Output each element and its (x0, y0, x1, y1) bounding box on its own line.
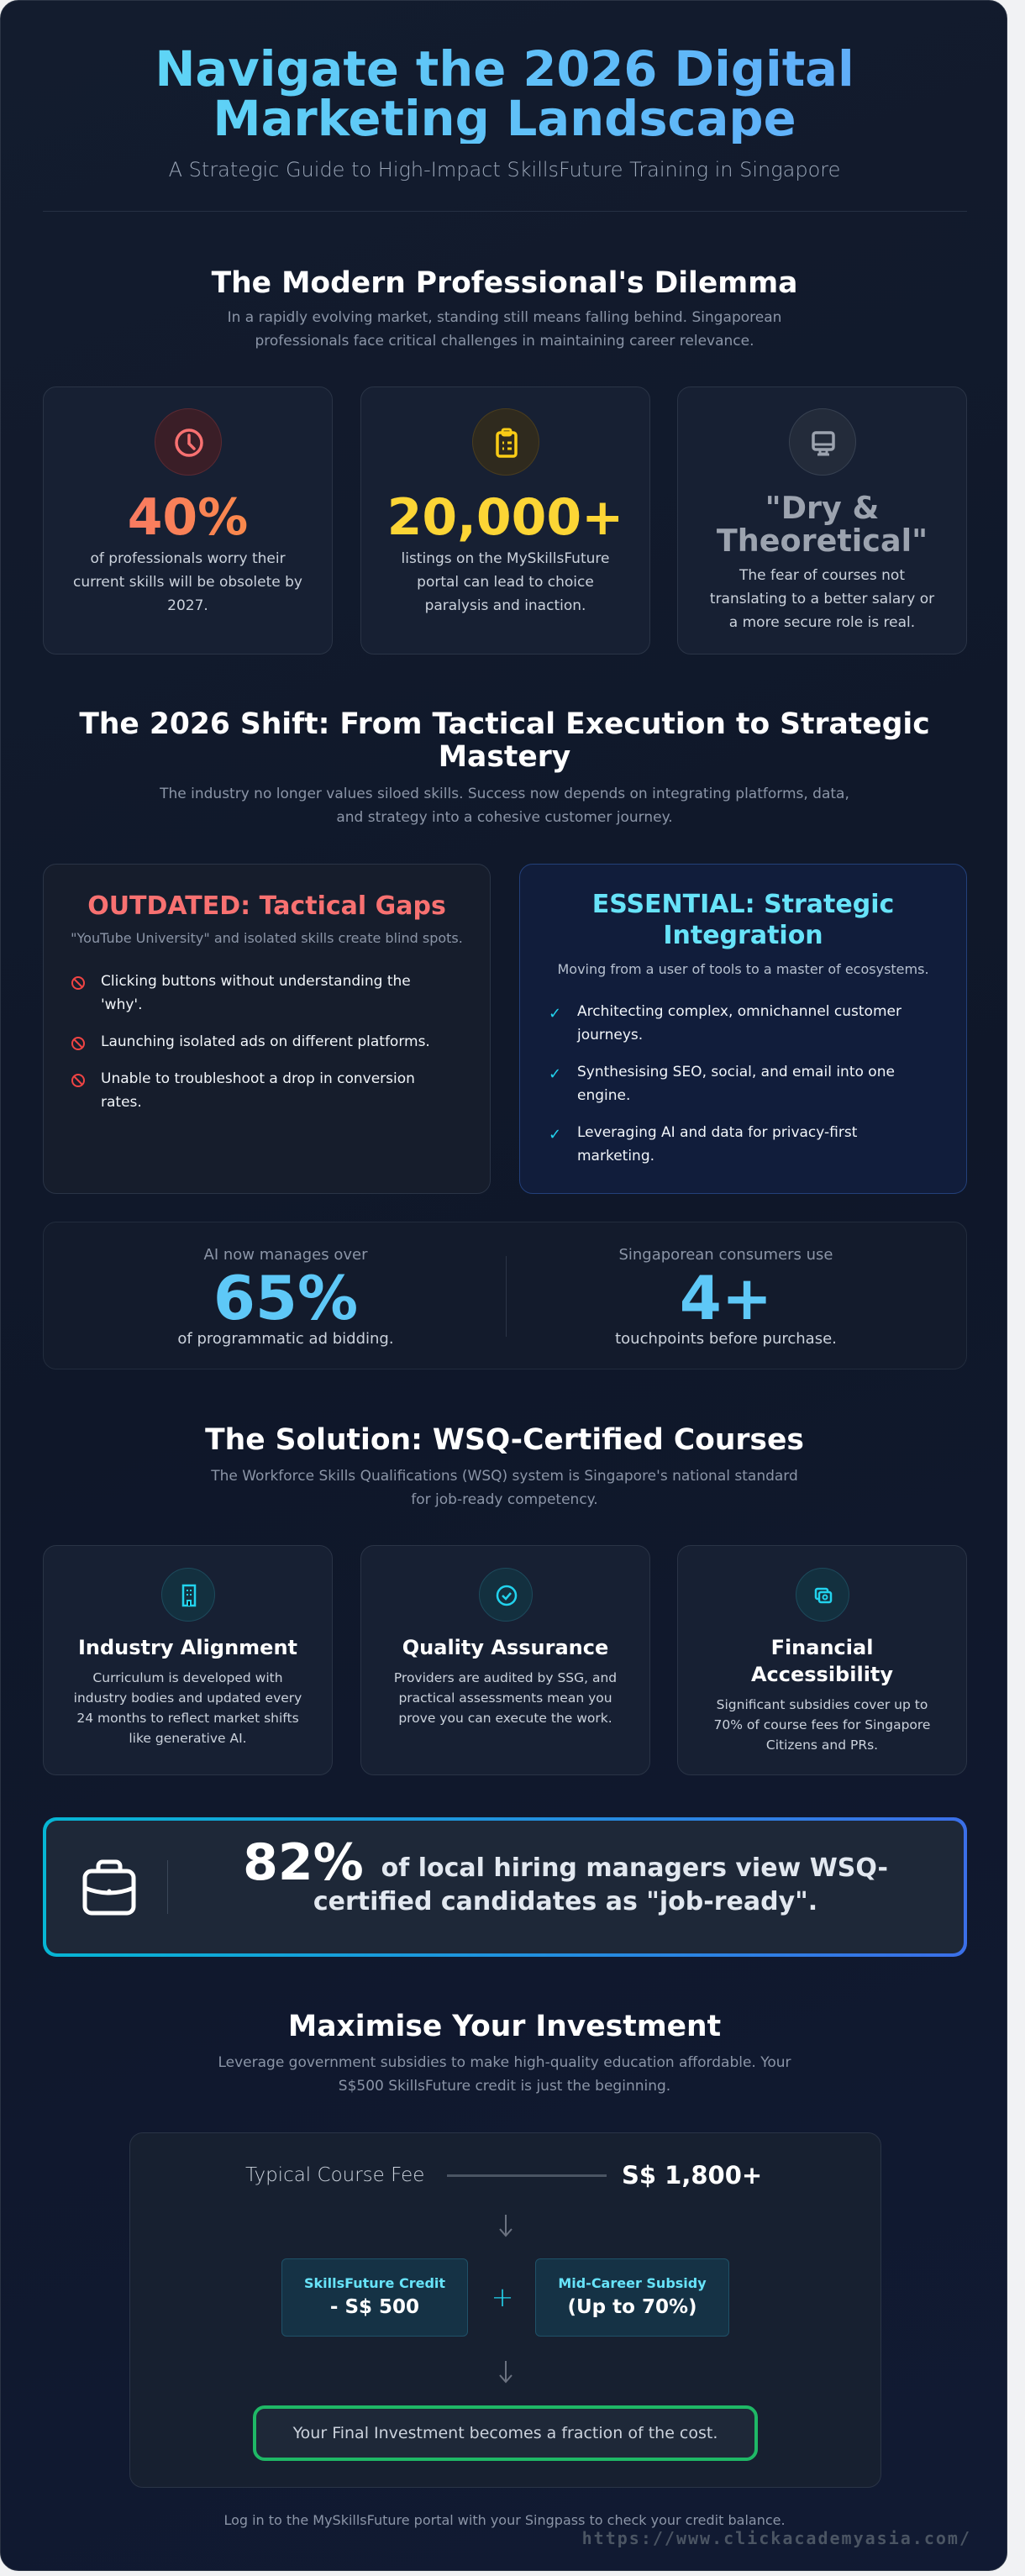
list (549, 1003, 901, 1164)
box: final investment: Your Final Investment becomes a fraction of the cost. (293, 2424, 718, 2442)
list (71, 973, 430, 1111)
text: 82% statement: certified candidates as "job-ready". (313, 1887, 817, 1916)
list: 'why'. (101, 996, 143, 1013)
title: Marketing Landscape (213, 91, 796, 147)
box: skillsfuture credit (281, 2258, 468, 2337)
text: maximise intro: S$500 SkillsFuture credit is just the beginning. (339, 2078, 670, 2095)
text: maximise intro (218, 2054, 791, 2095)
text: shift intro: and strategy into a cohesive customer journey. (336, 809, 673, 826)
list: marketing. (577, 1148, 654, 1164)
text: maximise intro: Leverage government subsidies to make high-quality education affordable. Your (218, 2054, 791, 2071)
icon: money (796, 1568, 849, 1622)
text: dilemma intro: professionals face critical challenges in maintaining career relevance. (255, 333, 754, 350)
stat: 40%: 40% (128, 488, 248, 547)
text: solution intro (211, 1468, 798, 1508)
title (751, 1636, 893, 1686)
text (73, 550, 302, 614)
text: dilemma intro (228, 309, 781, 350)
title: Quality Assurance (402, 1636, 608, 1659)
list: Launching isolated ads on different platforms. (101, 1033, 430, 1050)
box: skillsfuture credit: SkillsFuture Credit (304, 2275, 445, 2291)
list: Unable to troubleshoot a drop in conversion (101, 1070, 415, 1087)
icon: plus: + (491, 2281, 513, 2313)
text (402, 550, 609, 614)
row: typical course fee: Typical Course Fee (245, 2164, 424, 2186)
text: The fear of courses not (739, 567, 905, 584)
stat: dry & theoretical (717, 490, 928, 559)
stat: 40% (44, 488, 332, 547)
arrow (499, 2361, 512, 2383)
title: Industry Alignment (78, 1636, 297, 1659)
text: practical assessments mean you (398, 1690, 612, 1706)
list: Leveraging AI and data for privacy-first (577, 1124, 857, 1141)
text: portal can lead to choice (417, 574, 594, 591)
stat: dry & theoretical: Theoretical" (717, 523, 928, 559)
stat: 20,000+: 20,000+ (387, 488, 623, 547)
list: Synthesising SEO, social, and email into one (577, 1064, 895, 1080)
text (394, 1670, 617, 1726)
icon: clock (155, 408, 222, 476)
text: a more secure role is real. (729, 614, 915, 631)
list: engine. (577, 1087, 630, 1104)
text: 2027. (167, 597, 208, 614)
text: solution intro: The Workforce Skills Qualifications (WSQ) system is Singapore's national standard (211, 1468, 798, 1485)
panel: industry alignment (43, 1545, 333, 1775)
text (714, 1697, 930, 1753)
text: paralysis and inaction. (425, 597, 586, 614)
text: Significant subsidies cover up to (717, 1697, 928, 1712)
list: Clicking buttons without understanding the (101, 973, 411, 990)
stat: 65%: 65% (213, 1263, 358, 1333)
text: 24 months to reflect market shifts (76, 1711, 299, 1726)
text: Citizens and PRs. (766, 1737, 878, 1753)
row: typical course fee (245, 2161, 762, 2190)
text: current skills will be obsolete by (73, 574, 302, 591)
text: prove you can execute the work. (398, 1711, 612, 1726)
title: Accessibility (751, 1663, 893, 1686)
heading (592, 890, 894, 950)
footer note: Log in to the MySkillsFuture portal with your Singpass to check your credit balance. (223, 2512, 786, 2528)
stat: 4+ (615, 1246, 837, 1348)
list: ✓ (549, 1005, 561, 1023)
box: skillsfuture credit: - S$ 500 (330, 2296, 419, 2318)
row: typical course fee: S$ 1,800+ (622, 2161, 762, 2190)
stat: 65%: of programmatic ad bidding. (177, 1330, 394, 1348)
heading: OUTDATED: Tactical Gaps (87, 891, 446, 921)
icon: briefcase (82, 1860, 136, 1916)
subtext: "YouTube University" and isolated skills create blind spots. (71, 930, 463, 946)
box: mid-career subsidy (535, 2258, 729, 2337)
heading: Integration (663, 921, 823, 950)
panel: dry & theoretical card (677, 386, 967, 655)
heading: ESSENTIAL: Strategic (592, 890, 894, 919)
text: Curriculum is developed with (92, 1670, 283, 1685)
box: mid-career subsidy: (Up to 70%) (567, 2296, 697, 2318)
text: solution intro: for job-ready competency. (411, 1491, 598, 1508)
text: dilemma intro: In a rapidly evolving market, standing still means falling behind. Singaporean (228, 309, 781, 326)
text: translating to a better salary or (710, 591, 934, 607)
text: 70% of course fees for Singapore (714, 1717, 930, 1732)
text: shift intro: The industry no longer values siloed skills. Success now depends on integrating platforms, data, (160, 786, 849, 802)
list: ✓ (549, 1126, 561, 1143)
stat: 4+: Singaporean consumers use (618, 1246, 833, 1264)
text: like generative AI. (129, 1731, 247, 1746)
stat: 65%: AI now manages over (204, 1246, 367, 1264)
heading: dilemma: The Modern Professional's Dilemma (212, 266, 797, 300)
icon: monitor (789, 408, 856, 476)
panel: 20,000+ card (360, 386, 650, 655)
panel: 40% card (43, 386, 333, 655)
title (1, 45, 1008, 144)
text (74, 1670, 302, 1746)
panel: outdated (43, 864, 491, 1194)
stat: 65% (177, 1246, 394, 1348)
list: ✓ (549, 1065, 561, 1083)
heading: 2026 shift: Mastery (439, 740, 570, 774)
panel: essential (519, 864, 967, 1194)
subtext: Moving from a user of tools to a master of ecosystems. (557, 961, 929, 977)
list: Architecting complex, omnichannel customer (577, 1003, 901, 1020)
heading: 2026 shift: The 2026 Shift: From Tactical Execution to Strategic (79, 707, 930, 741)
text: Providers are audited by SSG, and (394, 1670, 617, 1685)
text: listings on the MySkillsFuture (402, 550, 609, 567)
list: journeys. (577, 1027, 643, 1044)
icon: check circle (479, 1568, 533, 1622)
text: shift intro (160, 786, 849, 826)
box: final investment (253, 2405, 758, 2461)
icon: building (161, 1568, 215, 1622)
subtitle: A Strategic Guide to High-Impact SkillsFuture Training in Singapore (169, 158, 840, 181)
text: industry bodies and updated every (74, 1690, 302, 1706)
panel: financial accessibility (677, 1545, 967, 1775)
text: of professionals worry their (90, 550, 286, 567)
callout: 82% job-ready (43, 1817, 967, 1957)
stat: 4+: 4+ (680, 1263, 772, 1333)
footer url: https://www.clickacademyasia.com/ (582, 2528, 971, 2548)
list: rates. (101, 1094, 142, 1111)
title: Financial (771, 1636, 873, 1659)
heading: solution: The Solution: WSQ-Certified Courses (205, 1423, 804, 1457)
panel: quality assurance (360, 1545, 650, 1775)
arrow (499, 2215, 512, 2237)
text: 82% statement: 82% of local hiring managers view WSQ- (243, 1833, 888, 1892)
icon: clipboard (472, 408, 539, 476)
stat: dry & theoretical: "Dry & (765, 490, 879, 526)
heading: 2026 shift (79, 707, 930, 774)
text (710, 567, 934, 631)
box: mid-career subsidy: Mid-Career Subsidy (558, 2275, 707, 2291)
panel: fee breakdown (129, 2132, 881, 2488)
stat: 4+: touchpoints before purchase. (615, 1330, 837, 1348)
title: Navigate the 2026 Digital (155, 41, 854, 97)
panel: market stats (43, 1222, 967, 1369)
heading: maximise: Maximise Your Investment (288, 2010, 721, 2043)
